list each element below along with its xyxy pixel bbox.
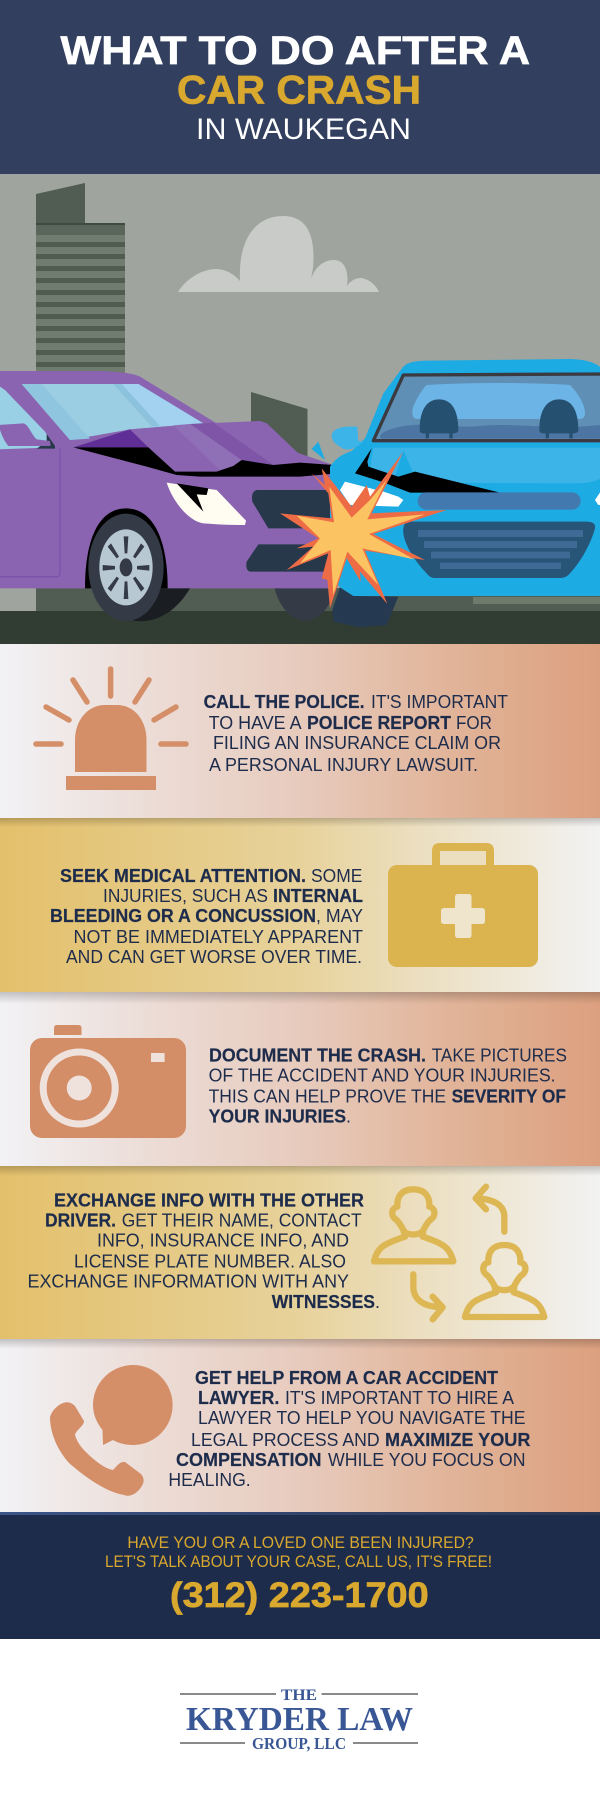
text: exchange info: EXCHANGE INFO WITH THE OTHER — [54, 1191, 364, 1211]
phone number: (312) 223-1700 — [170, 1576, 429, 1615]
city building — [36, 183, 125, 375]
text: seek medical attention: SEEK MEDICAL ATTENTION. — [60, 866, 306, 886]
person one — [374, 1189, 453, 1261]
text: call the police: FOR — [456, 713, 492, 733]
person two — [465, 1245, 544, 1317]
logo: the kryder law group: GROUP, LLC — [252, 1734, 346, 1753]
text: exchange info — [28, 1191, 380, 1312]
logo: the kryder law group — [180, 1687, 418, 1753]
icon: first aid kit — [388, 843, 538, 967]
crumpled hood — [73, 421, 333, 477]
cloud — [178, 216, 379, 292]
purple car — [0, 371, 338, 621]
text: seek medical attention: BLEEDING OR A CONCUSSION — [50, 906, 316, 926]
text: get help from a lawyer: IT'S IMPORTANT TO HIRE A — [285, 1388, 514, 1408]
grille — [403, 522, 595, 578]
side window and mirror — [0, 386, 55, 449]
hood highlight — [370, 448, 600, 483]
text: document the crash: OF THE ACCIDENT AND YOUR INJURIES. — [209, 1066, 556, 1086]
text: seek medical attention: NOT BE IMMEDIATELY APPARENT — [74, 927, 363, 947]
logo: the kryder law group: THE — [281, 1687, 317, 1704]
handset — [50, 1402, 144, 1496]
explosion — [280, 452, 447, 608]
grille — [246, 490, 333, 572]
call to action text — [105, 1534, 492, 1571]
logo: the kryder law group: KRYDER LAW — [186, 1701, 413, 1738]
title line: in waukegan: IN WAUKEGAN — [196, 113, 411, 146]
text: call the police: CALL THE POLICE. — [204, 692, 365, 712]
bumper bar — [418, 492, 581, 510]
header panel — [0, 0, 600, 174]
hood crease — [395, 450, 413, 477]
panel: seek medical attention — [0, 818, 600, 992]
panel: get help from a lawyer — [0, 1339, 600, 1512]
text: get help from a lawyer: LEGAL PROCESS AND — [191, 1430, 380, 1450]
text: document the crash: DOCUMENT THE CRASH. — [209, 1046, 426, 1066]
text: exchange info: WITNESSES — [272, 1292, 375, 1312]
icon: two people exchanging — [374, 1187, 544, 1319]
front tire — [332, 587, 398, 627]
text: get help from a lawyer: HEALING. — [168, 1470, 251, 1490]
ground and road — [0, 588, 600, 644]
text: exchange info: INFO, INSURANCE INFO, AND — [97, 1231, 349, 1251]
title line: car crash: CAR CRASH — [177, 69, 421, 113]
text: get help from a lawyer: COMPENSATION — [176, 1450, 322, 1470]
text: seek medical attention: INJURIES, SUCH AS — [103, 886, 268, 906]
text: document the crash: TAKE PICTURES — [432, 1046, 567, 1066]
call to action panel — [0, 1512, 600, 1639]
text: call the police: IT'S IMPORTANT — [371, 692, 508, 712]
text: call the police — [204, 692, 508, 775]
speech bubble — [93, 1365, 173, 1445]
text: exchange info: EXCHANGE INFORMATION WITH ANY — [28, 1272, 349, 1292]
crumple crack — [355, 448, 500, 493]
text: document the crash: SEVERITY OF — [452, 1087, 566, 1107]
windshield — [373, 374, 600, 441]
text: get help from a lawyer: MAXIMIZE YOUR — [385, 1430, 530, 1450]
crash illustration — [0, 174, 600, 644]
title line: what to do after a: WHAT TO DO AFTER A — [60, 29, 530, 73]
flying shard — [312, 442, 325, 460]
icon: camera — [30, 1025, 186, 1138]
text: call the police: A PERSONAL INJURY LAWSUIT. — [209, 755, 478, 775]
text: document the crash: . — [346, 1107, 351, 1127]
text: exchange info: LICENSE PLATE NUMBER. ALSO — [74, 1252, 346, 1272]
headlight — [167, 483, 246, 525]
car body — [0, 371, 333, 588]
text: call the police: FILING AN INSURANCE CLAIM OR — [213, 733, 501, 753]
text: exchange info: GET THEIR NAME, CONTACT — [122, 1211, 362, 1231]
body — [330, 359, 600, 596]
text: exchange info: DRIVER. — [45, 1211, 116, 1231]
text: get help from a lawyer: LAWYER. — [198, 1388, 279, 1408]
back building — [251, 392, 308, 480]
text: get help from a lawyer: LAWYER TO HELP YOU NAVIGATE THE — [198, 1408, 526, 1428]
text: seek medical attention: SOME — [311, 866, 362, 886]
text: seek medical attention — [50, 866, 363, 967]
text: seek medical attention: AND CAN GET WORSE OVER TIME. — [66, 947, 362, 967]
call to action text: LET'S TALK ABOUT YOUR CASE, CALL US, IT'S FREE! — [105, 1553, 492, 1571]
panel: exchange info — [0, 1166, 600, 1339]
blue car — [312, 359, 600, 627]
text: exchange info: . — [375, 1292, 380, 1312]
panel: call the police — [0, 644, 600, 818]
icon: phone with speech bubble — [50, 1365, 173, 1496]
side mirror — [332, 427, 363, 449]
text: call the police: TO HAVE A — [209, 713, 302, 733]
text: get help from a lawyer: GET HELP FROM A CAR ACCIDENT — [195, 1368, 498, 1388]
text: document the crash: YOUR INJURIES — [209, 1107, 346, 1127]
arrow up — [476, 1187, 504, 1232]
front wheel — [85, 508, 190, 621]
rear wheel of purple car front axle — [272, 513, 338, 621]
icon: siren — [36, 669, 186, 790]
text: document the crash — [209, 1046, 567, 1127]
headlights — [340, 482, 600, 507]
door line — [0, 448, 60, 577]
windshield — [22, 384, 203, 440]
text: seek medical attention: INTERNAL — [273, 886, 363, 906]
text: document the crash: THIS CAN HELP PROVE THE — [209, 1087, 446, 1107]
text: call the police: POLICE REPORT — [307, 713, 451, 733]
arrow down — [413, 1274, 443, 1319]
call to action text: HAVE YOU OR A LOVED ONE BEEN INJURED? — [127, 1534, 474, 1552]
panel: document the crash — [0, 992, 600, 1166]
text: seek medical attention: , MAY — [316, 906, 363, 926]
text: get help from a lawyer: WHILE YOU FOCUS ON — [328, 1450, 526, 1470]
text: get help from a lawyer — [168, 1368, 530, 1490]
